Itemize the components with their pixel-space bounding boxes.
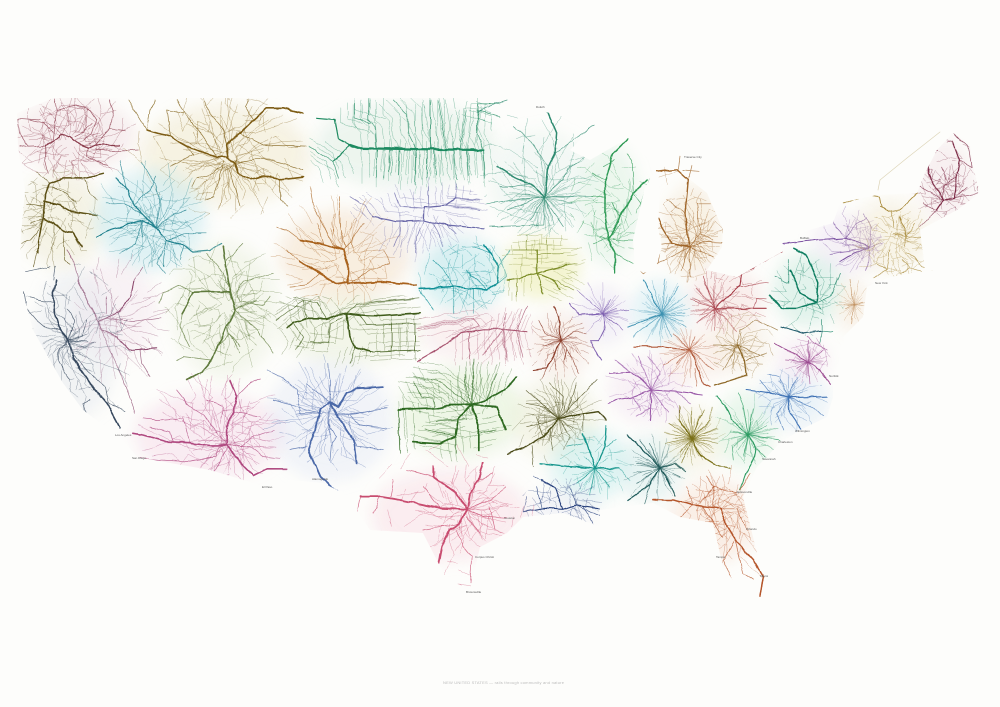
city labels: Corpus Christi: [475, 555, 494, 559]
northern border strand: [878, 132, 940, 190]
city labels: Norfolk: [829, 374, 839, 378]
region: Colorado network: [274, 292, 422, 368]
city labels: Wilmington: [795, 429, 810, 433]
region: Wisconsin network: [568, 138, 650, 274]
region: Georgia network: [654, 399, 730, 472]
region: Montana network: [122, 98, 313, 219]
region: New England network: [842, 192, 933, 278]
city labels: El Paso: [262, 485, 273, 489]
region: Pennsylvania coast network: [830, 278, 866, 330]
city labels: Tampa: [716, 555, 725, 559]
region: Minnesota network: [476, 100, 600, 238]
region: Nebraska network: [350, 176, 488, 266]
region: Ohio network: [690, 252, 783, 334]
region: Arkansas network: [504, 374, 607, 467]
city labels: Brownsville: [466, 590, 482, 594]
region: Iowa network: [491, 231, 586, 304]
city labels: Orlando: [746, 527, 757, 531]
region: Kansas north teal network: [411, 232, 510, 319]
region: Wyoming network: [270, 186, 417, 306]
city labels: Miami: [760, 574, 768, 578]
caption: NEW UNITED STATES — rails through community and nature: [443, 680, 565, 685]
region: South Carolina network: [707, 390, 780, 490]
city labels: New York: [875, 281, 888, 285]
region: New Mexico network: [262, 354, 393, 491]
region: Arizona network: [132, 373, 288, 480]
region: Kentucky network: [605, 344, 702, 432]
city labels: [115, 105, 888, 594]
region: Dakotas network: [308, 98, 500, 194]
city labels: Traverse City: [684, 155, 702, 159]
city labels: Savannah: [762, 457, 776, 461]
city labels: San Diego: [132, 456, 146, 460]
region: Texas network: [357, 444, 538, 586]
region: Illinois network: [570, 281, 635, 360]
region: Tennessee network: [633, 322, 730, 394]
city labels: Los Angeles: [115, 433, 132, 437]
region: Appalachia network: [703, 306, 785, 388]
city labels: Buffalo: [800, 236, 810, 240]
region: Kansas south network: [414, 298, 533, 366]
city labels: Charleston: [778, 440, 793, 444]
city labels: Houston: [504, 516, 516, 520]
city labels: Duluth: [536, 105, 545, 109]
region: New York network: [782, 206, 884, 272]
region: Oregon network: [20, 168, 104, 270]
region: Virginia network: [774, 330, 831, 386]
river-style network map: [18, 98, 978, 597]
map poster: [18, 98, 978, 685]
region: Michigan network: [634, 156, 723, 282]
region: Louisiana network: [522, 476, 602, 524]
region: Idaho network: [86, 160, 222, 275]
region: Utah network: [158, 241, 285, 380]
region: Florida network: [647, 461, 789, 600]
region: Nevada network: [25, 238, 202, 424]
city labels: Jacksonville: [736, 490, 753, 494]
region: Alabama network: [611, 434, 686, 504]
region: Maine network: [912, 133, 978, 227]
region: Washington network: [18, 98, 139, 180]
region: West Virginia network: [768, 248, 846, 344]
region: Oklahoma network: [398, 358, 522, 462]
region: Missouri network: [526, 306, 598, 384]
city labels: Alamogordo: [312, 477, 329, 481]
region: North Carolina network: [746, 368, 829, 432]
region: California network: [23, 264, 132, 429]
region: Indiana network: [627, 278, 696, 346]
region: Mississippi network: [540, 427, 638, 508]
